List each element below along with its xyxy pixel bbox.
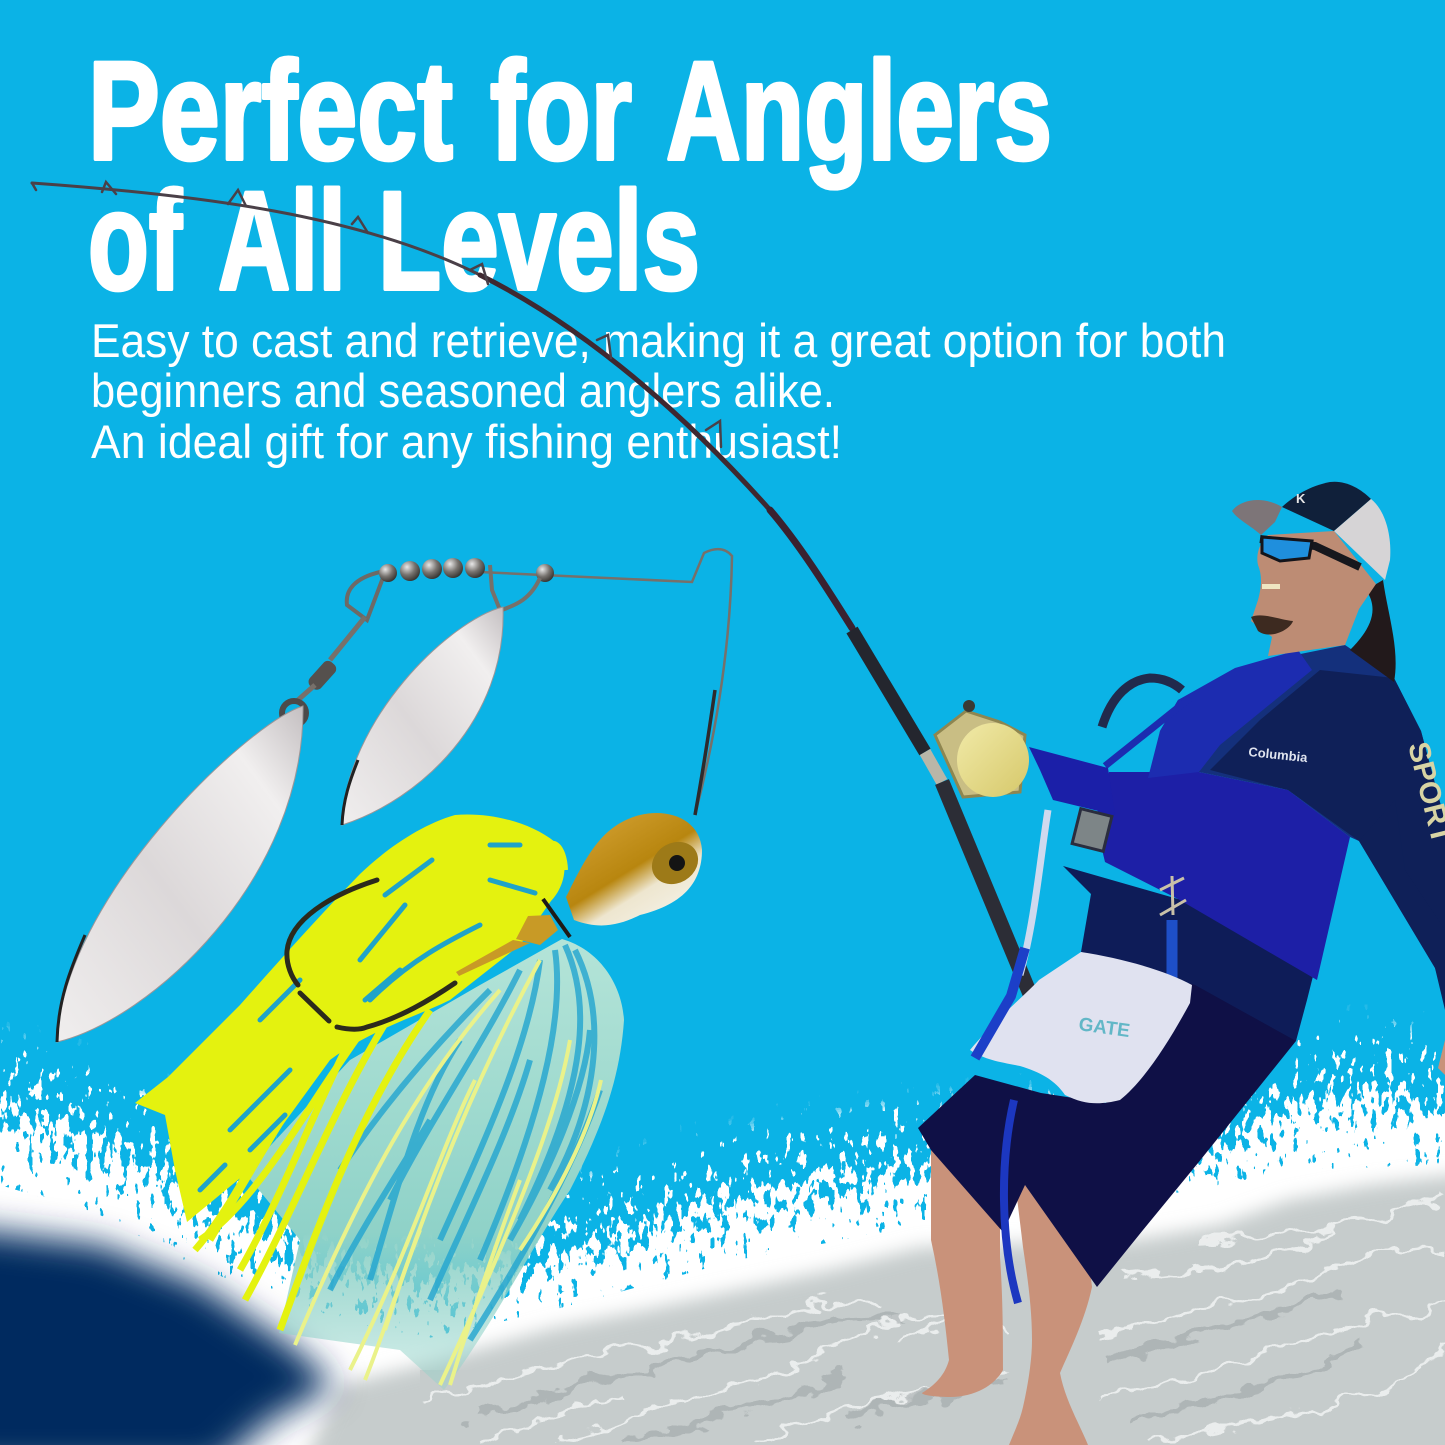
angler: fighting belt plate: GATE [1077,1014,1131,1042]
foam: white surf with spray [0,1085,1445,1445]
foam: solid white base [0,1165,1445,1445]
title: Anglers [666,32,1052,189]
spinnerbait lure [57,549,732,1390]
title: Perfect [88,32,453,189]
angler: hand at right edge [1438,1040,1445,1075]
angler: shorts [918,925,1300,1303]
lure: pale blue skirt [245,939,624,1390]
angler: legs [922,1147,1092,1445]
title: All [218,162,346,319]
angler: right arm [1359,800,1445,1010]
description text: beginners and seasoned anglers alike. [91,364,835,417]
fishing reel [935,700,1029,797]
angler: head: K [1296,491,1306,506]
angler: fighting belt plate [970,948,1192,1103]
lure: jig head [456,813,706,976]
title: Levels [378,162,700,319]
fishing rod [32,182,1040,1018]
title: of [88,162,182,319]
title [88,32,1052,319]
lure: beads and swivels [282,558,554,725]
lure: hook [287,880,455,1029]
angler [918,482,1445,1445]
title: for [490,32,632,189]
lure: large willow blade [57,706,303,1042]
description text [91,314,1226,468]
lure: yellow skirt [135,814,566,1330]
angler: torso and harness [1020,645,1445,1041]
description text: Easy to cast and retrieve, making it a great option for both [91,314,1226,367]
angler: head [1232,482,1396,682]
lure: small willow blade [342,607,503,825]
dark navy water corner [0,1225,335,1445]
description text: An ideal gift for any fishing enthusiast! [91,415,842,468]
angler: torso and harness: Columbia [1248,744,1309,765]
sand beach [300,1173,1445,1445]
lure: wire arm [480,549,732,815]
